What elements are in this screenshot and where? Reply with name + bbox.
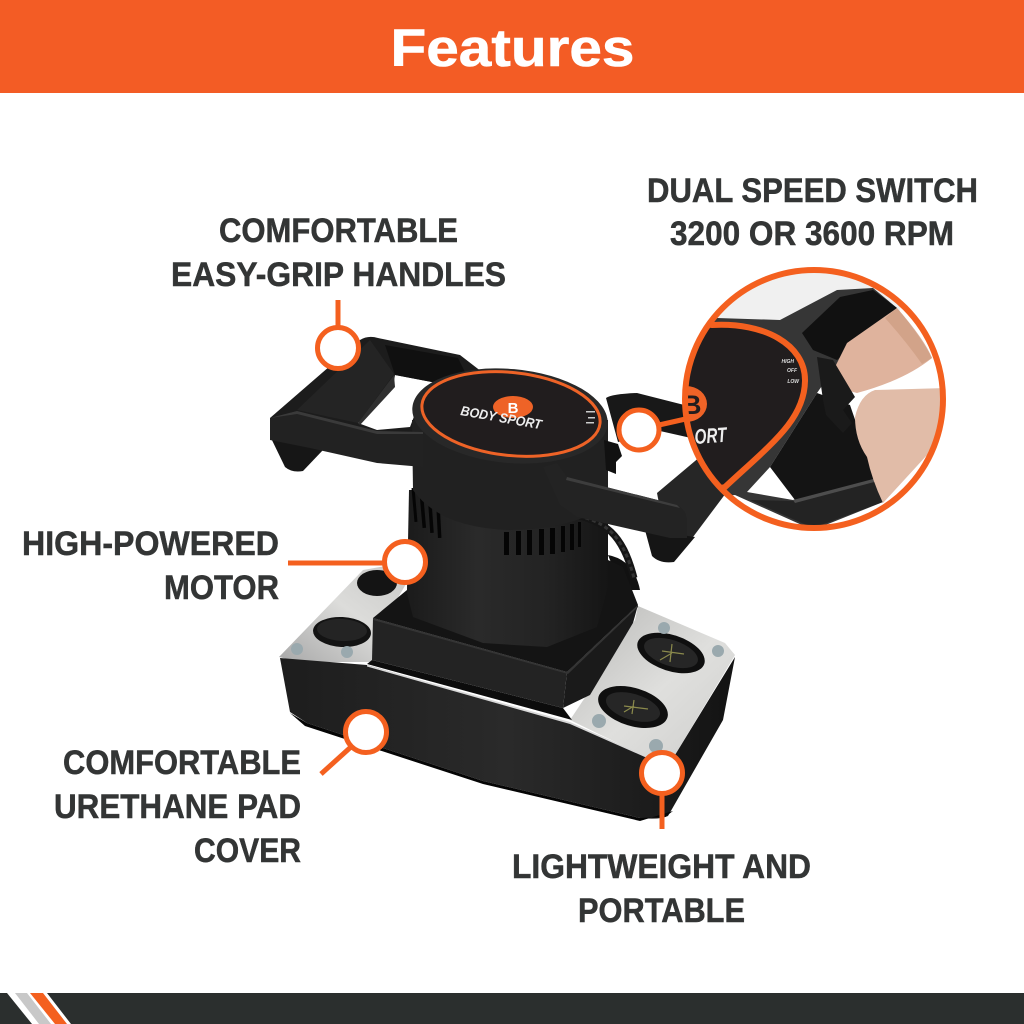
- callout connector lines: [288, 300, 690, 829]
- base plate left: [279, 560, 420, 662]
- title: Features: [390, 19, 634, 78]
- inset dial logo: [688, 386, 707, 422]
- callout marker: motor: [384, 542, 426, 582]
- motor housing: [407, 488, 608, 649]
- inset dial brand text: ORT: [694, 424, 729, 449]
- front right handle: [543, 463, 695, 562]
- base plate right: [570, 606, 735, 757]
- right handle back bar and grip: [606, 393, 735, 537]
- header banner: [0, 0, 1024, 93]
- left handle frame: [270, 337, 520, 467]
- zoomed inset: dual speed switch: OFF: [787, 368, 798, 374]
- front left handle: [270, 411, 423, 472]
- speed marks: [586, 411, 595, 424]
- zoomed inset: dual speed switch: B: [682, 390, 702, 420]
- urethane pad: [280, 657, 735, 821]
- zoomed inset: dual speed switch: LOW: [787, 379, 800, 385]
- switch: [604, 440, 622, 474]
- logo badge: [493, 396, 533, 418]
- product illustration: massager: [270, 337, 735, 821]
- inset speed labels: HIGH: [782, 359, 794, 365]
- label: handles: EASY-GRIP HANDLES: [171, 256, 506, 294]
- callout marker: handles: [318, 328, 358, 368]
- callout marker: portable: [642, 752, 682, 794]
- inset switch: [817, 357, 855, 404]
- zoomed inset: dual speed switch: [665, 265, 950, 535]
- collar and dial: B: [508, 400, 519, 417]
- label: pad cover: URETHANE PAD: [54, 788, 301, 826]
- label: lightweight: LIGHTWEIGHT AND: [512, 848, 811, 886]
- inset handle body: [714, 288, 897, 525]
- label: dual speed switch: DUAL SPEED SWITCH: [647, 172, 978, 210]
- upper housing: [412, 420, 608, 530]
- label: motor: HIGH-POWERED: [22, 525, 279, 563]
- label: motor: MOTOR: [164, 569, 279, 607]
- inset dial: [688, 322, 808, 490]
- label: handles: COMFORTABLE: [219, 212, 458, 250]
- label: pad cover: COVER: [194, 832, 301, 870]
- inset fingers: [835, 308, 950, 503]
- footer band with stripes: [0, 993, 1024, 1024]
- label: lightweight: PORTABLE: [578, 892, 745, 930]
- power cable: [572, 514, 640, 590]
- callout marker: switch: [619, 410, 659, 450]
- collar and dial: [408, 361, 612, 471]
- label: dual speed switch: 3200 OR 3600 RPM: [670, 215, 954, 253]
- square motor mount: [367, 555, 638, 720]
- callout marker: pad: [346, 712, 386, 752]
- label: pad cover: COMFORTABLE: [63, 744, 301, 782]
- brand name: BODY SPORT: [459, 403, 544, 432]
